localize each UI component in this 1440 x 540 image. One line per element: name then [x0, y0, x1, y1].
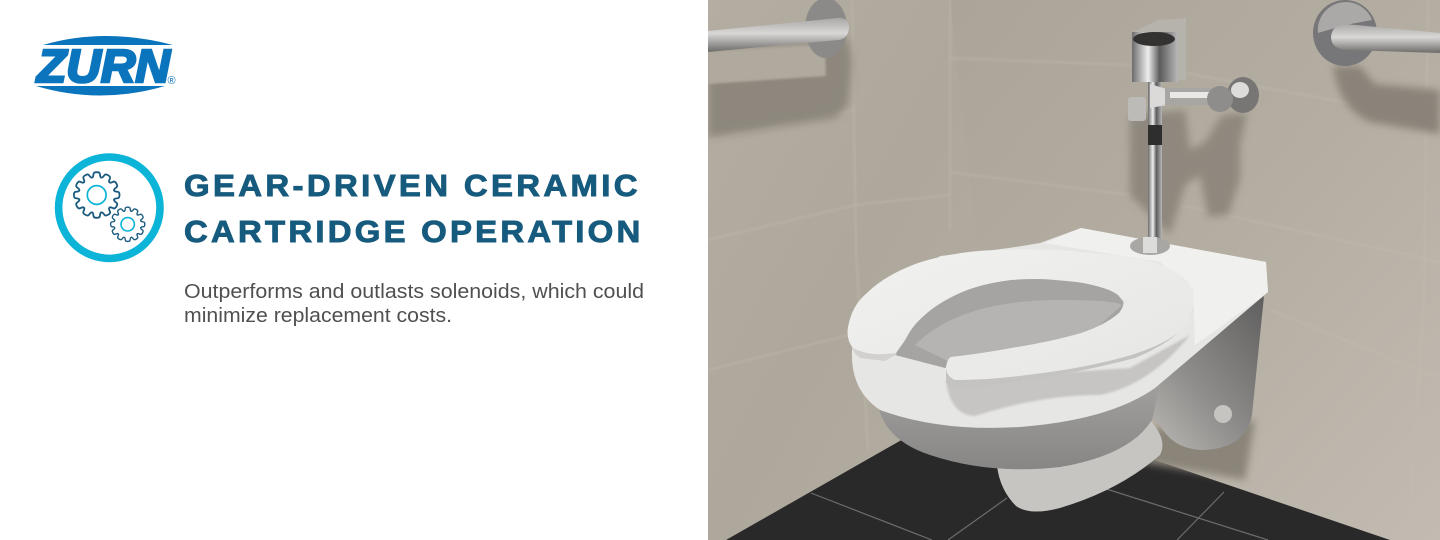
bowl [878, 385, 1160, 469]
rim and deck [852, 228, 1268, 428]
logo: Zurn: ZURN [35, 40, 171, 92]
heading [184, 168, 640, 249]
floor [726, 438, 1390, 540]
seat [848, 249, 1194, 380]
valve shadow [1130, 110, 1247, 235]
right grab bar [1313, 0, 1440, 134]
icon: gears in circle [54, 153, 164, 262]
left grab bar [708, 0, 852, 138]
body text [184, 281, 644, 327]
wall bracket [1130, 296, 1264, 450]
body text: Outperforms and outlasts solenoids, which could [184, 281, 644, 303]
right wall [950, 0, 1440, 540]
trap [997, 420, 1162, 512]
seat shadow on rim [946, 335, 1190, 416]
wall backdrop [708, 0, 1440, 540]
heading: GEAR-DRIVEN CERAMIC [184, 168, 638, 203]
left wall [708, 0, 1000, 540]
seat side [946, 307, 1193, 388]
bowl opening [895, 276, 1130, 368]
bracket shadow [1140, 420, 1255, 480]
panel: text side [0, 0, 708, 540]
flush valve [1128, 18, 1259, 255]
heading: CARTRIDGE OPERATION [184, 214, 640, 249]
body text: minimize replacement costs. [184, 305, 452, 327]
deck top [1044, 228, 1268, 345]
logo: Zurn: ® [168, 75, 176, 87]
photo: wall-mounted toilet with flush valve [708, 0, 1440, 540]
bracket bolt [1214, 405, 1232, 423]
